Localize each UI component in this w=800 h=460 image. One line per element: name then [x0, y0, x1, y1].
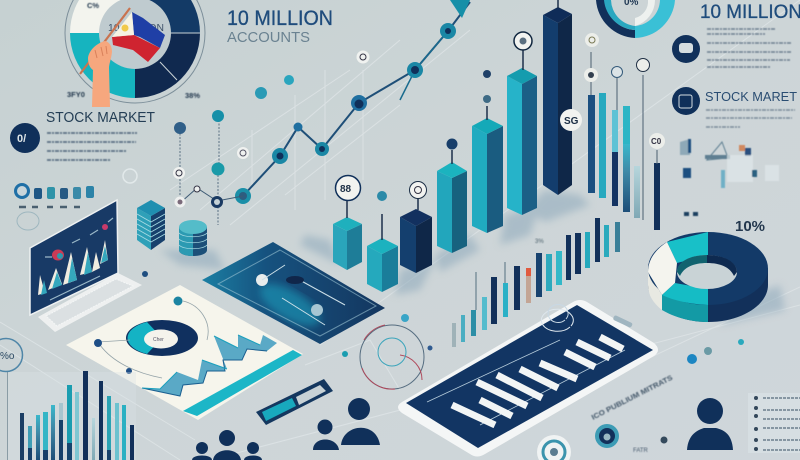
top-right ring chart: [596, 0, 675, 38]
left text block: [47, 133, 137, 160]
left ring icon: %o: [0, 351, 15, 362]
bottom-left bar chart: [7, 371, 136, 460]
laptop: [30, 200, 142, 332]
network circle diagram: [360, 325, 424, 389]
small pie labels: 38%: [185, 91, 200, 100]
laptop screen chart: [38, 218, 113, 300]
line chart with nodes: [123, 0, 470, 225]
zigzag area chart: [142, 335, 277, 396]
smartphone: [398, 300, 658, 456]
dark tablet panel: [202, 242, 385, 344]
bar G: [543, 0, 572, 195]
caption below phone: ICO PUBLIUM MITRATS: [590, 373, 674, 422]
bar A: 88: [340, 184, 352, 195]
bar A: [333, 176, 362, 270]
title: 10 million accounts: ACCOUNTS: [227, 29, 310, 46]
right icon lower: [672, 87, 700, 115]
title: 10 million accounts: 10 MILLION: [227, 7, 333, 30]
right icon upper: [672, 35, 700, 63]
people icons: [192, 398, 380, 460]
right text block lower: [706, 110, 795, 127]
isometric 3D bar chart: [333, 0, 582, 292]
right small icon cluster: [680, 139, 779, 216]
white report panel: [66, 285, 303, 420]
ring badges near phone: FATR: [633, 448, 649, 454]
left icon badge: [10, 123, 40, 153]
bar F: [507, 32, 537, 215]
top-left pie chart with flag: [65, 0, 205, 107]
bar E: [472, 70, 503, 233]
left icon badge: 0/: [17, 133, 26, 145]
badge: bar G value: SG: [564, 116, 579, 127]
icon: raised fist: [88, 41, 112, 107]
heading: stock market right: STOCK MARET: [705, 89, 797, 104]
label: 10 percent: 10%: [735, 218, 765, 235]
heading: 10 million right: 10 MILLION: [700, 2, 800, 23]
person icon right: [687, 398, 733, 450]
badge: bar G value: [560, 109, 582, 131]
small pie labels: C%: [87, 1, 99, 10]
teal footer strip: [183, 350, 302, 416]
small pie labels: [67, 1, 200, 100]
ground shadows: [160, 190, 785, 325]
right text block upper: [707, 29, 792, 67]
heading: stock market: STOCK MARKET: [46, 109, 155, 126]
thin vertical bars: [584, 33, 665, 230]
ring badges near phone: [537, 424, 668, 460]
scattered dots: [142, 271, 744, 364]
small pill widget: [256, 379, 333, 425]
stacked cylinders: [137, 200, 207, 256]
flag of the Philippines: [80, 8, 165, 74]
row of small icons: [14, 183, 94, 230]
report donut chart: Cher: [153, 337, 164, 343]
small pie labels: 3FY0: [67, 90, 85, 99]
title: 10 million accounts: [227, 7, 333, 46]
right list panel: [748, 393, 800, 453]
bar D: [437, 138, 467, 253]
report donut chart: [126, 320, 198, 356]
thin vertical bars: C0: [651, 137, 662, 146]
diagonal bar chart: [452, 218, 620, 347]
phone bars: [452, 337, 623, 425]
bar C: [400, 182, 432, 273]
top-left pie chart with flag: 10 MILLION: [108, 23, 164, 34]
left ring icon: [0, 338, 22, 372]
3D donut chart: [648, 232, 768, 322]
diagonal bar chart: 3%: [535, 239, 544, 245]
bar B: [367, 191, 398, 292]
